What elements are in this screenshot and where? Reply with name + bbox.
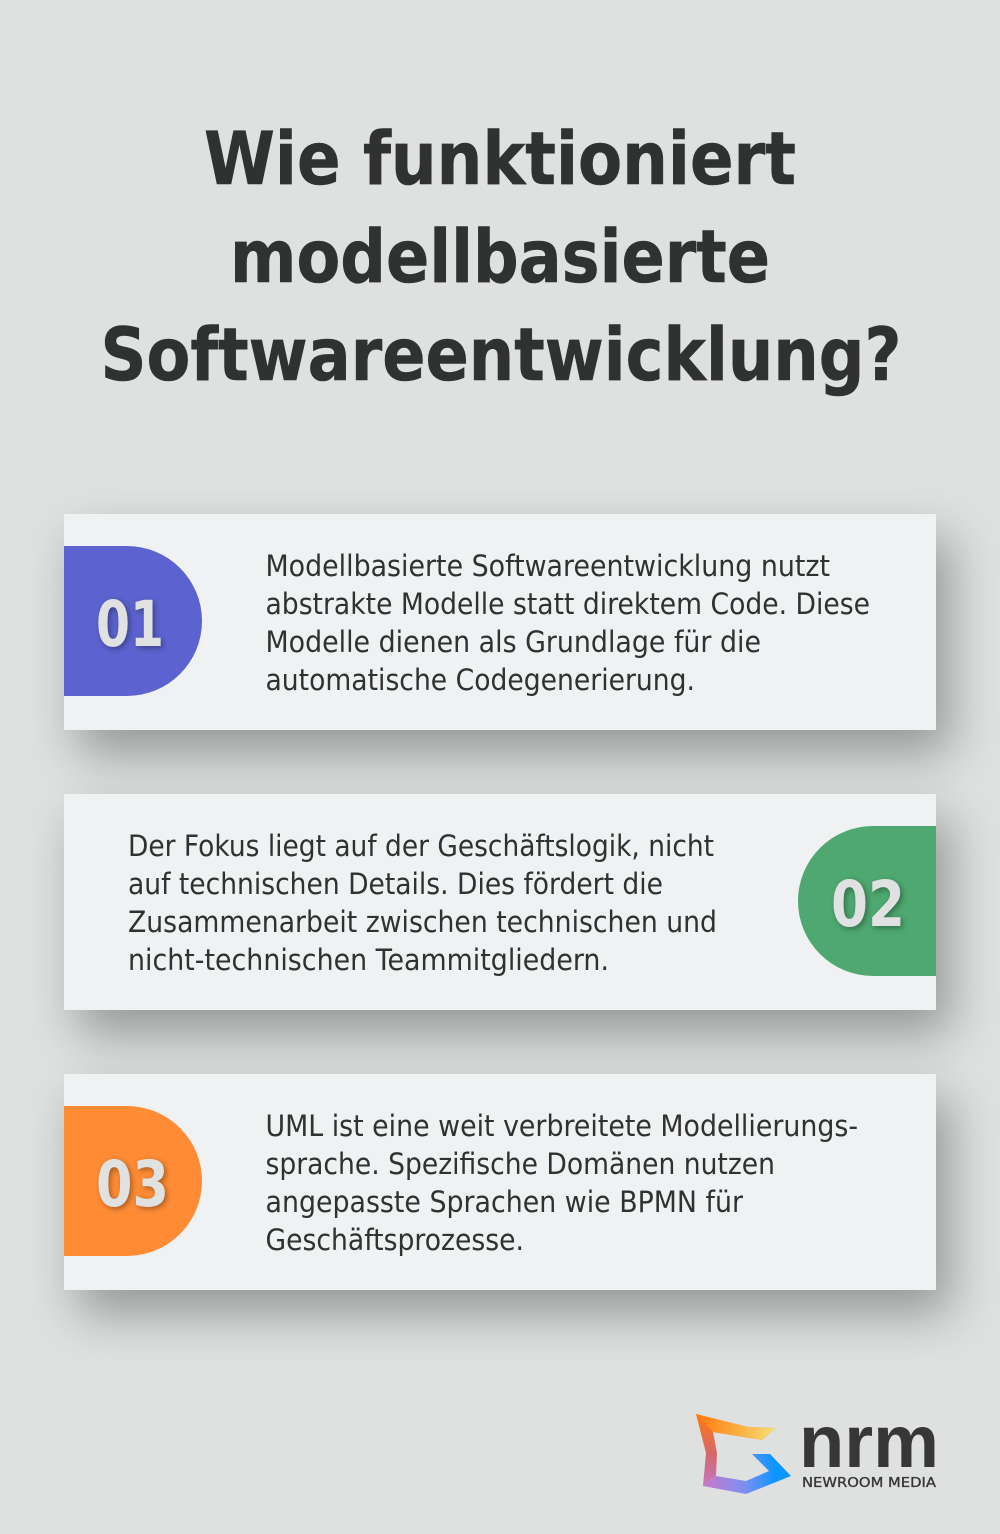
panel 2: text: auf technischen Details. Dies fördert die bbox=[128, 867, 663, 901]
panel 1: number badge 01 bbox=[64, 546, 202, 696]
panel 1: text: Modelle dienen als Grundlage für die bbox=[266, 625, 761, 659]
panel 2: text: Zusammenarbeit zwischen technischen und bbox=[128, 905, 717, 939]
title bbox=[100, 117, 902, 398]
panel 3: text: UML ist eine weit verbreitete Modellierungs- bbox=[266, 1109, 858, 1143]
panel 3: text: angepasste Sprachen wie BPMN für bbox=[266, 1185, 744, 1219]
title: Wie funktioniert bbox=[204, 117, 796, 202]
logo wordmark: nrm bbox=[799, 1400, 939, 1483]
panel 1: text bbox=[266, 549, 870, 697]
panel 1: number badge 01: 01 bbox=[96, 588, 164, 661]
panel 3: text bbox=[266, 1109, 858, 1257]
logo: Newroom Media bbox=[696, 1400, 939, 1494]
panel 3: number badge 03: 03 bbox=[96, 1148, 169, 1221]
title: modellbasierte bbox=[230, 215, 770, 300]
panel 1: text: automatische Codegenerierung. bbox=[266, 663, 695, 697]
card 2 background bbox=[64, 794, 936, 1010]
panel 3: text: sprache. Spezifische Domänen nutzen bbox=[266, 1147, 775, 1181]
panel 2: number badge 02 bbox=[798, 826, 936, 976]
panel 3: text: Geschäftsprozesse. bbox=[266, 1223, 524, 1257]
panel 3: number badge 03 bbox=[64, 1106, 202, 1256]
panel 1: text: Modellbasierte Softwareentwicklung nutzt bbox=[266, 549, 830, 583]
card 3 background bbox=[64, 1074, 936, 1290]
panel 1: text: abstrakte Modelle statt direktem Code. Diese bbox=[266, 587, 870, 621]
panel 2: number badge 02: 02 bbox=[831, 868, 905, 941]
panel 2: text: Der Fokus liegt auf der Geschäftslogik, nicht bbox=[128, 829, 714, 863]
card 1 background bbox=[64, 514, 936, 730]
logo tagline: NEWROOM MEDIA bbox=[802, 1475, 937, 1491]
panel 2: text: nicht-technischen Teammitgliedern. bbox=[128, 943, 609, 977]
icon: logo mark bbox=[696, 1414, 791, 1494]
title: Softwareentwicklung? bbox=[100, 313, 902, 398]
panel 2: text bbox=[128, 829, 717, 977]
